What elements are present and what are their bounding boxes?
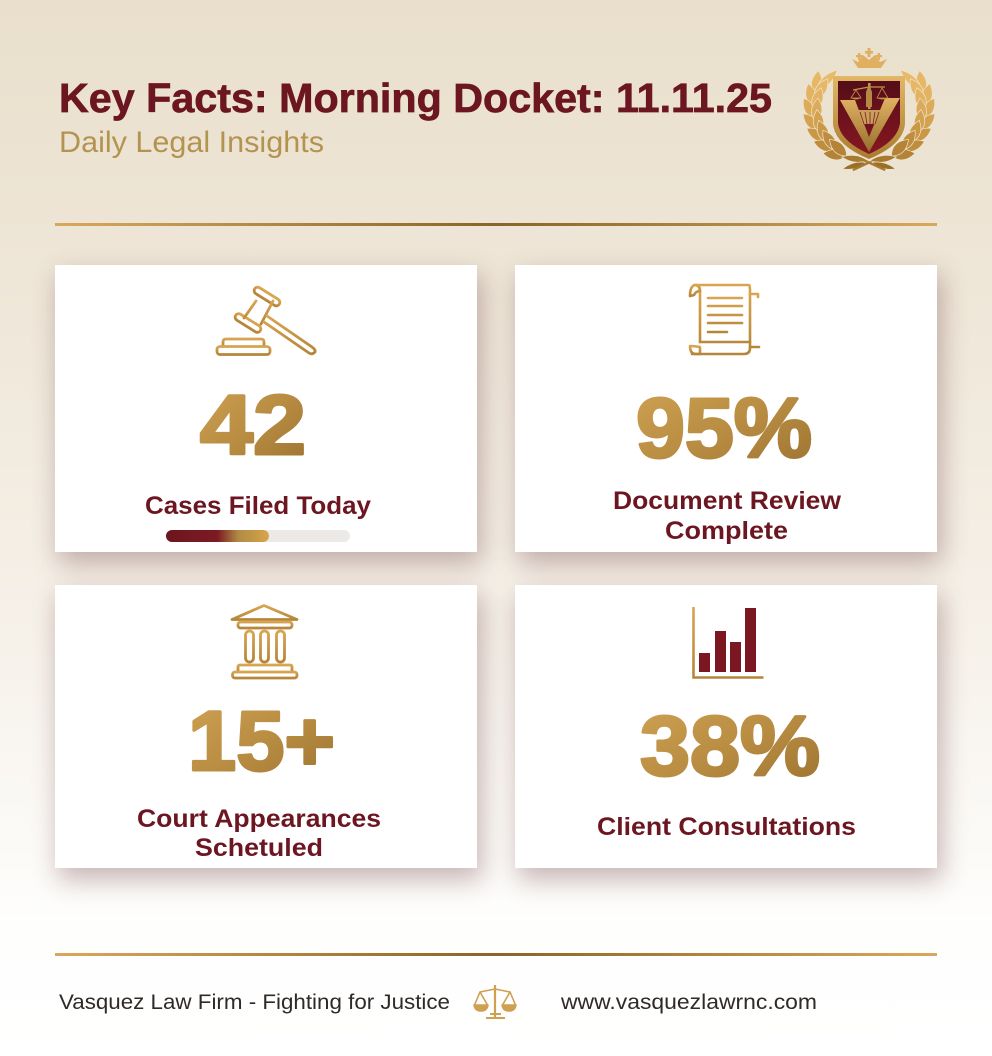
icon: bar chart bbox=[694, 607, 764, 678]
value: 15+: 15+ bbox=[188, 694, 335, 788]
icon: gavel bbox=[217, 286, 315, 354]
title: Key Facts: Morning Docket: 11.11.25 bbox=[59, 75, 772, 121]
label: court appearances scheduled: Schetuled bbox=[195, 834, 323, 862]
panel: cases filed bbox=[55, 265, 477, 552]
right laurel bbox=[857, 67, 939, 172]
icon: scales of justice bbox=[474, 985, 516, 1018]
panel: document review bbox=[515, 265, 937, 552]
value: 95%: 95% bbox=[636, 381, 812, 475]
crown bbox=[852, 48, 887, 68]
footer website: www.vasquezlawrnc.com bbox=[560, 991, 817, 1014]
card background bbox=[55, 585, 477, 868]
footer firm name: Vasquez Law Firm - Fighting for Justice bbox=[59, 991, 450, 1014]
card background bbox=[515, 585, 937, 868]
card shadows bbox=[58, 275, 942, 880]
label: document review complete bbox=[613, 487, 842, 545]
label: court appearances scheduled: Court Appearances bbox=[137, 805, 381, 833]
divider top bbox=[55, 223, 937, 226]
label: client consultations: Client Consultations bbox=[597, 813, 856, 841]
label: document review complete: Complete bbox=[665, 517, 788, 545]
subtitle: Daily Legal Insights bbox=[59, 126, 324, 159]
panel: court appearances bbox=[55, 585, 477, 868]
value: 42: 42 bbox=[200, 378, 306, 472]
label: document review complete: Document Review bbox=[613, 487, 842, 515]
divider bottom bbox=[55, 953, 937, 956]
icon: scroll bbox=[690, 285, 759, 354]
label: court appearances scheduled bbox=[137, 805, 381, 862]
label: cases filed today: Cases Filed Today bbox=[145, 492, 371, 520]
card background bbox=[515, 265, 937, 552]
left laurel bbox=[799, 67, 881, 172]
value: 38%: 38% bbox=[640, 699, 820, 793]
card background bbox=[55, 265, 477, 552]
emblem: laurel shield and crown bbox=[799, 48, 939, 172]
shield bbox=[833, 76, 905, 159]
panel: client consultations bbox=[515, 585, 937, 868]
progress bar bbox=[166, 530, 350, 542]
icon: courthouse bbox=[232, 606, 297, 678]
